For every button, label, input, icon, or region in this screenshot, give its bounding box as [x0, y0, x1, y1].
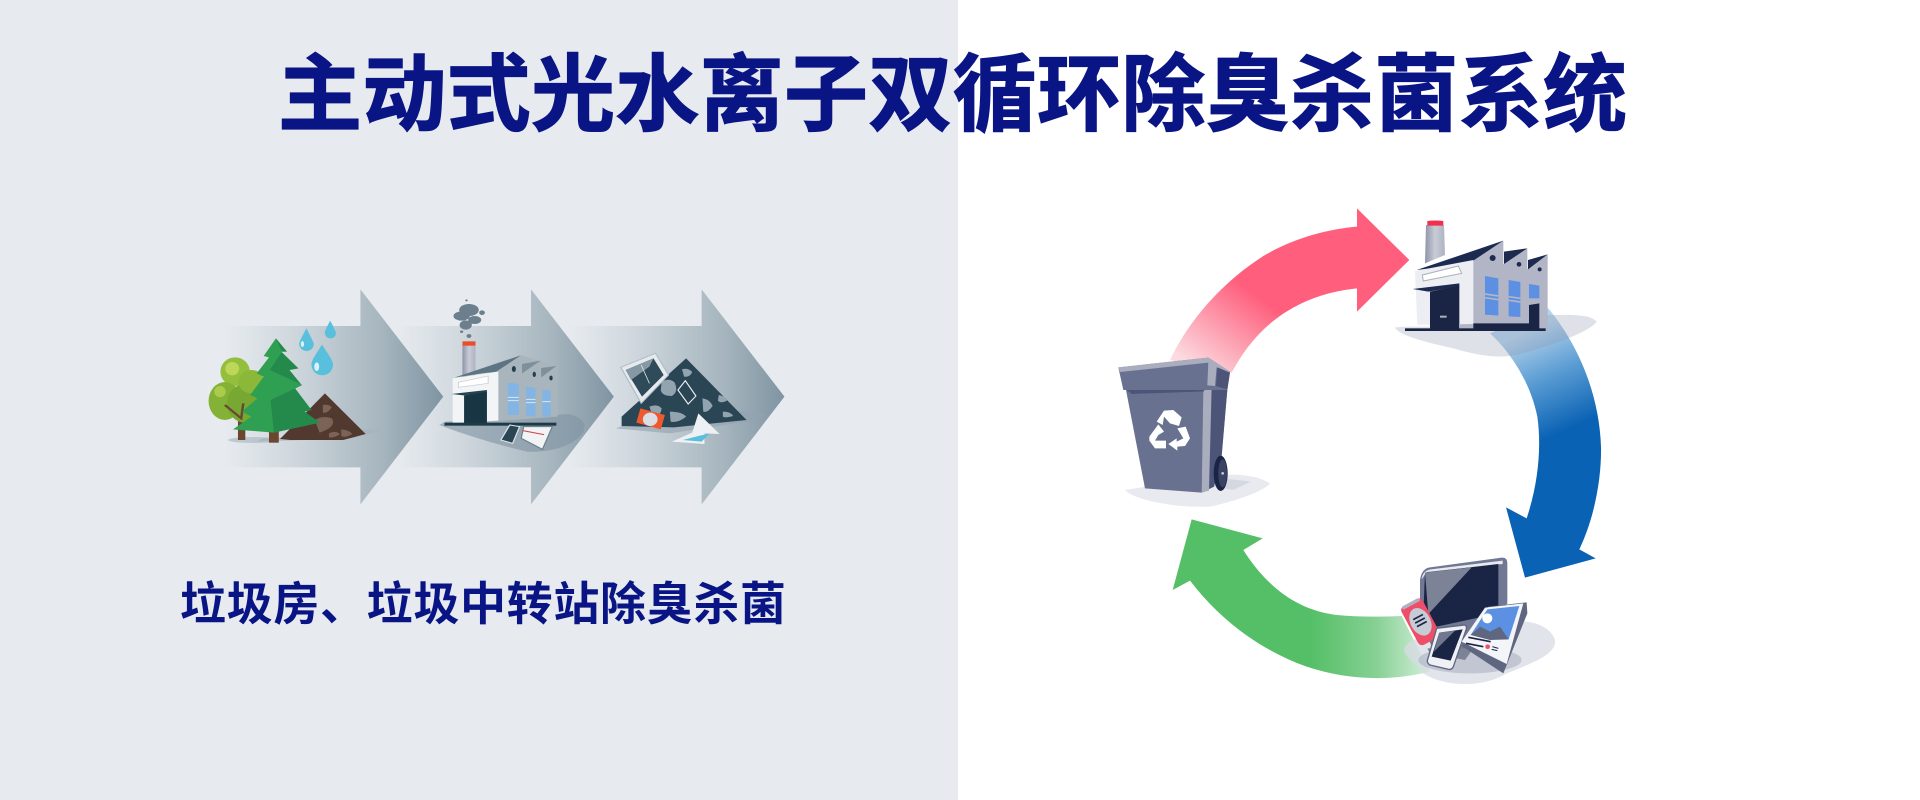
caption: application scene: 垃圾房、垃圾中转站除臭杀菌	[180, 578, 786, 630]
icon: dark waste pile	[616, 353, 766, 444]
panel: left background	[0, 0, 958, 800]
arrow: second stage	[396, 289, 614, 504]
arrow: blue, factory to products	[1490, 308, 1601, 578]
icon: recycling bin	[1118, 358, 1270, 507]
main title: 主动式光水离子双循环除臭杀菌系统	[278, 48, 1627, 142]
arrow: third stage	[568, 289, 784, 504]
icon: electronics and can waste	[1400, 558, 1555, 684]
panel: right recycling loop	[1118, 208, 1601, 678]
icon: factory with smoke and waste	[439, 299, 585, 452]
icon: trees, soil and water drops	[209, 321, 386, 443]
arrow: red, bin to factory	[1170, 208, 1409, 373]
icon: recycle symbol	[1149, 410, 1190, 451]
icon: factory	[1395, 220, 1597, 356]
arrow: first stage	[225, 289, 443, 504]
panel: left process arrows	[209, 289, 784, 504]
arrow: green, products to bin	[1173, 519, 1430, 678]
